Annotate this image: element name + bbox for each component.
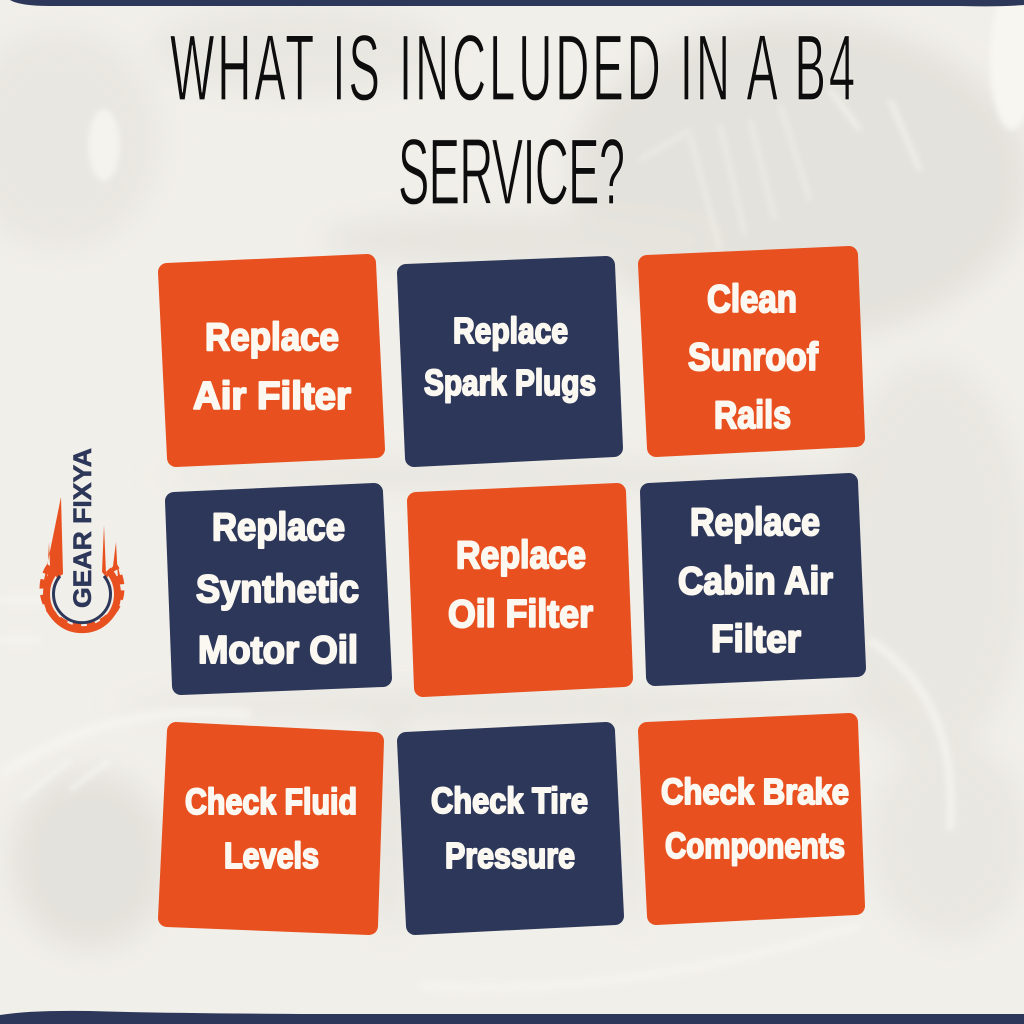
panel: replace cabin air filter [649,482,857,677]
panel: replace spark plugs: Spark Plugs [424,362,596,403]
panel: check tire pressure: Check Tire [431,780,588,821]
panel: replace spark plugs: Replace [453,310,568,351]
top bar [10,0,1024,6]
panel: replace synthetic motor oil [174,492,383,686]
panel: replace cabin air filter: Cabin Air [678,560,833,603]
panel: replace synthetic motor oil: Motor Oil [198,629,358,672]
icon: gear teeth [43,566,121,627]
panel: check fluid levels: Levels [224,835,319,876]
panel: replace synthetic motor oil: Synthetic [196,568,359,611]
panel: clean sunroof rails: Sunroof [688,336,819,379]
panel: check tire pressure [406,731,615,926]
panel: replace oil filter: Oil Filter [448,593,593,636]
panel: clean sunroof rails: Rails [714,394,791,437]
panel: clean sunroof rails: Clean [707,278,797,321]
panel: replace spark plugs [406,265,614,458]
panel: check fluid levels [167,731,375,926]
icon: gear inner arc [54,576,110,623]
title: SERVICE? [398,119,625,224]
title [170,15,855,224]
panel: check brake components [647,722,856,916]
panel: replace synthetic motor oil: Replace [212,506,345,549]
panel: check tire pressure: Pressure [445,835,575,876]
logo: Gear Fixya [43,448,121,630]
icon: gear ring [46,570,118,630]
title: WHAT IS INCLUDED IN A B4 [170,15,855,120]
bottom bar [0,1011,1024,1024]
panel: check brake components: Components [665,825,845,866]
panel: replace oil filter [416,492,624,688]
panel: check brake components: Check Brake [661,771,849,812]
icon: flame spikes [44,497,121,580]
panel: replace air filter: Air Filter [193,375,351,418]
panel: replace cabin air filter: Replace [690,501,820,544]
panel: replace air filter [167,263,376,458]
logo wordmark: GEAR FIXYA [69,448,97,608]
panel: replace cabin air filter: Filter [711,618,801,661]
panel: replace oil filter: Replace [456,534,586,577]
panel: check fluid levels: Check Fluid [185,781,357,822]
panel: replace air filter: Replace [205,316,339,359]
panel: clean sunroof rails [647,255,856,448]
